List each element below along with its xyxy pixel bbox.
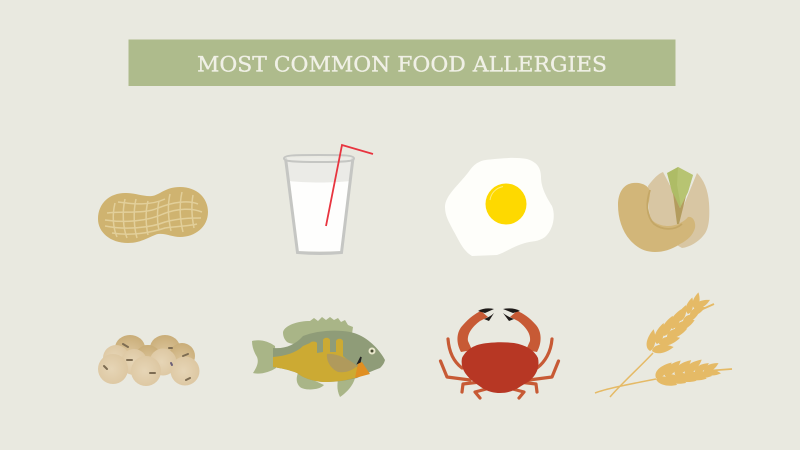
- legs: [440, 339, 558, 398]
- red straw: [326, 145, 373, 226]
- icon: wheat stalks: [595, 292, 732, 397]
- icon: fried egg: [445, 158, 554, 256]
- pectoral fin: [327, 354, 357, 372]
- icon: soybeans: [98, 335, 200, 386]
- claws: [457, 311, 488, 352]
- shell: [462, 342, 539, 393]
- pistachio nut: [667, 167, 693, 208]
- eye: [368, 348, 376, 354]
- icon: pistachio and cashew: [618, 167, 709, 252]
- pistachio shell: [648, 172, 709, 248]
- lower ear: [653, 356, 732, 389]
- cashew: [618, 183, 695, 252]
- lower fins: [297, 373, 324, 389]
- yellow belly: [273, 338, 358, 382]
- icon: glass of milk with straw: [284, 145, 373, 254]
- title banner: [128, 40, 676, 86]
- stems: [595, 379, 656, 393]
- body: [273, 331, 385, 382]
- title banner: MOST COMMON FOOD ALLERGIES: [197, 52, 607, 76]
- icon: fish: [252, 317, 385, 397]
- icon: peanut: [98, 187, 208, 243]
- gill: [355, 362, 370, 378]
- dorsal fin: [283, 317, 353, 344]
- upper ear: [645, 292, 714, 354]
- icon: crab: [440, 308, 558, 398]
- tail: [252, 340, 276, 374]
